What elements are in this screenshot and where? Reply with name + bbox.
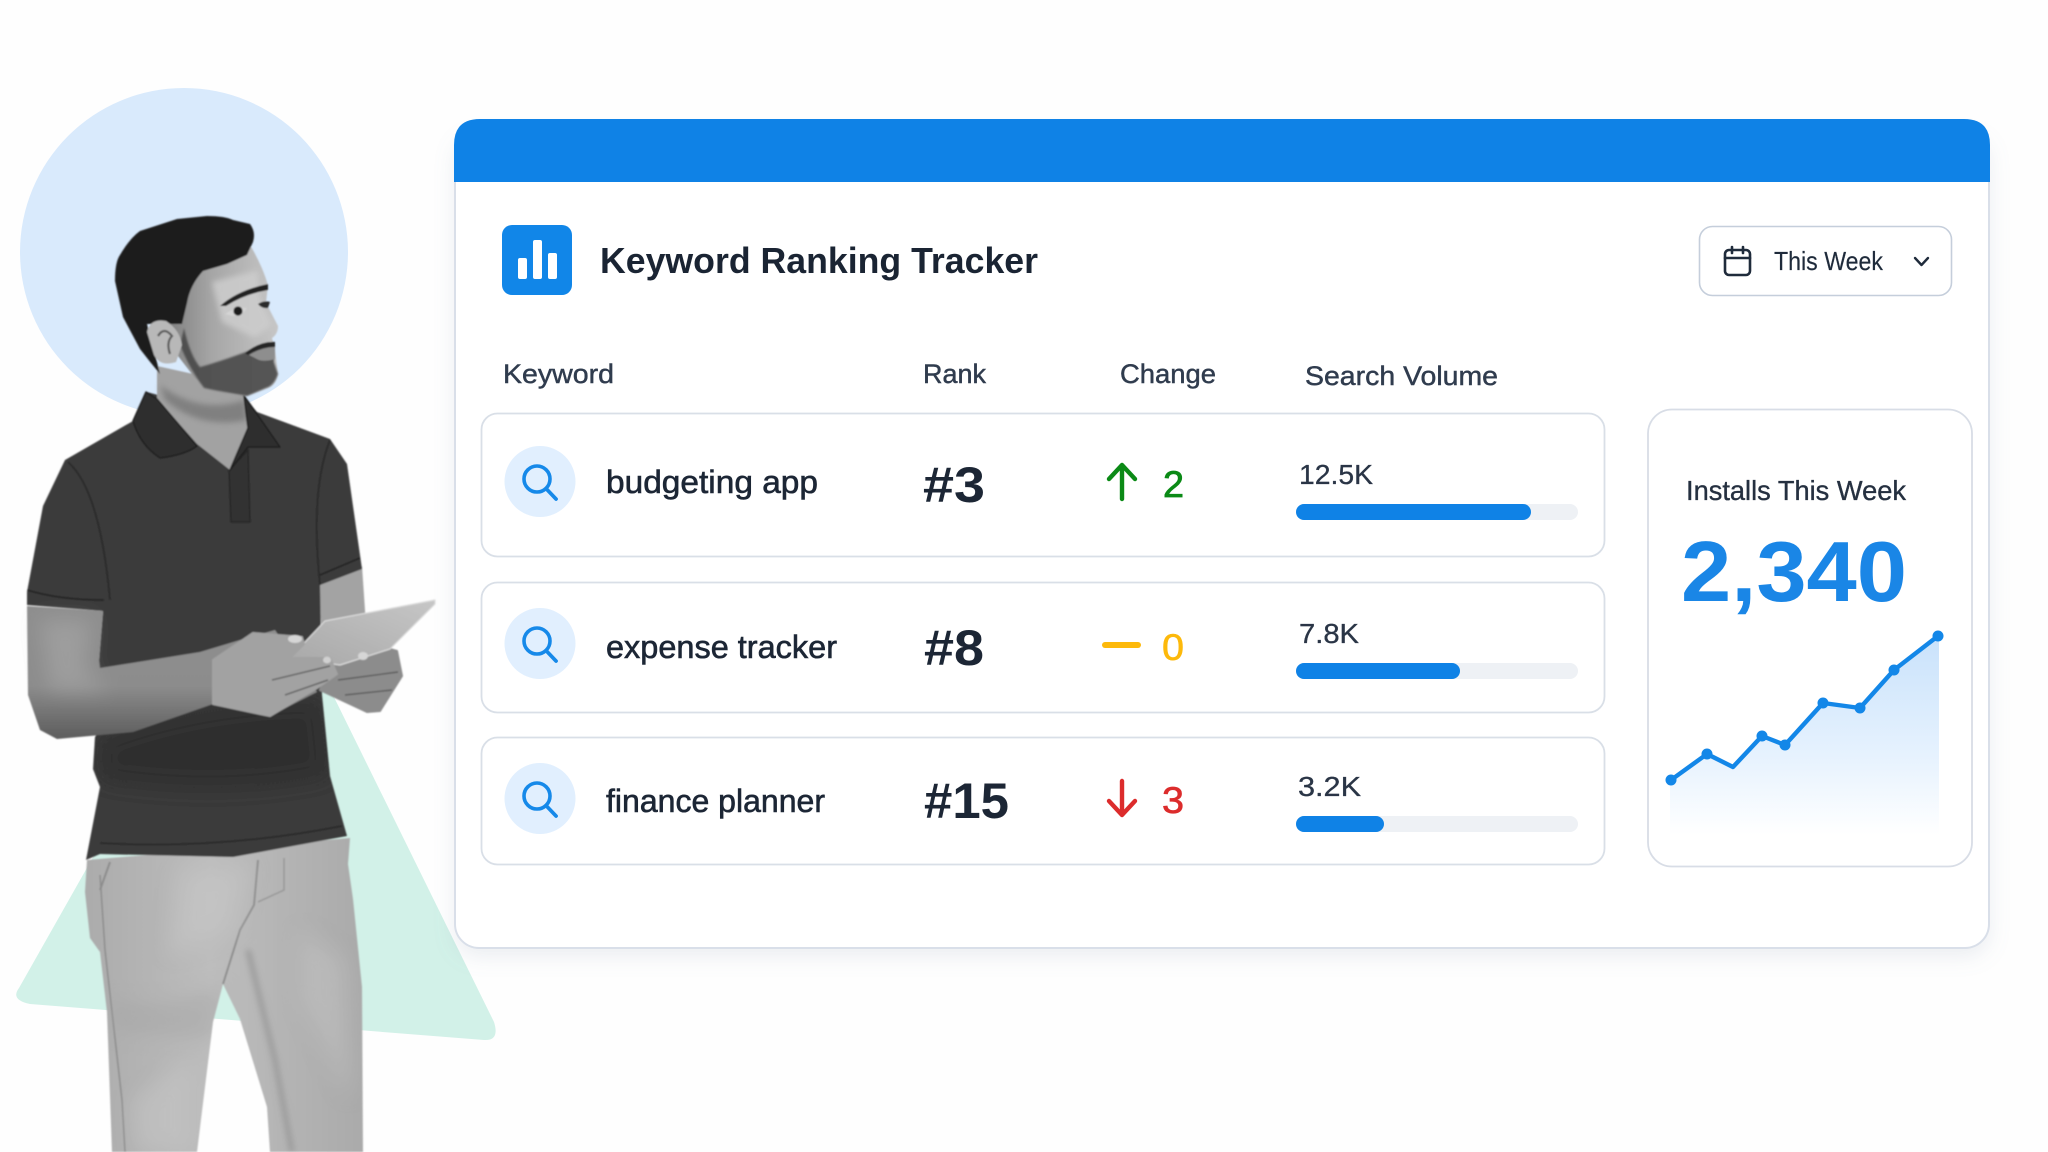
dropdown label: This Week: [1774, 246, 1884, 276]
placket: [229, 450, 250, 522]
left arm: [27, 606, 317, 739]
search volume: 12.5K: [1299, 459, 1373, 490]
change: dash: [1102, 642, 1141, 648]
big number: 2,340: [1681, 525, 1907, 620]
neck shadow: [160, 385, 247, 422]
far eye: [258, 301, 270, 308]
head: [115, 216, 278, 396]
column headings: Change: [1120, 359, 1216, 389]
collar: [133, 392, 280, 470]
face: [158, 245, 278, 396]
title: Keyword Ranking Tracker: [600, 240, 1038, 281]
eye: [225, 308, 247, 316]
change value: 3: [1162, 780, 1184, 821]
panel header bar: [454, 119, 1990, 182]
search volume: 3.2K: [1298, 771, 1361, 802]
row: budgeting app: [482, 414, 1604, 556]
rank: #3: [923, 457, 985, 513]
panel: installs this week: [1648, 410, 1972, 866]
icon: search: [504, 763, 576, 834]
rank: #15: [924, 773, 1009, 829]
keyword: expense tracker: [606, 629, 837, 665]
tablet: [290, 600, 435, 665]
forearm highlight: [40, 620, 110, 690]
iris: [233, 306, 243, 316]
shirt: [27, 392, 362, 860]
hair: [115, 216, 254, 374]
icon: search: [504, 446, 576, 517]
label: Installs This Week: [1686, 475, 1907, 506]
background triangle: [16, 555, 496, 1040]
column headings: [503, 359, 1498, 391]
column headings: Search Volume: [1305, 361, 1498, 391]
change: up arrow: [1109, 465, 1135, 499]
right hand: [320, 649, 402, 712]
beard: [180, 328, 278, 396]
trousers: [85, 838, 363, 1152]
date dropdown: [1700, 226, 1952, 296]
line chart: [1666, 630, 1944, 835]
volume bar: [1296, 816, 1578, 832]
eyebrow: [220, 284, 268, 306]
neck: [157, 366, 248, 470]
change value: 0: [1162, 627, 1184, 668]
person with tablet: [27, 216, 435, 1152]
panel: dashboard card: [454, 119, 1990, 948]
keyword: budgeting app: [606, 464, 818, 500]
icon: search: [504, 608, 576, 679]
change: down arrow: [1109, 781, 1135, 815]
volume bar: [1296, 663, 1578, 679]
row: expense tracker: [482, 582, 1604, 712]
change value: 2: [1163, 464, 1184, 505]
fingers: [213, 633, 398, 716]
ear: [147, 320, 182, 363]
row: finance planner: [482, 738, 1604, 864]
rank: #8: [924, 620, 984, 676]
icon: bar chart badge: [502, 225, 572, 295]
right arm upper: [318, 566, 366, 680]
icon: calendar: [1725, 247, 1750, 275]
lips: [249, 347, 275, 361]
column headings: Rank: [923, 359, 986, 389]
keyword: finance planner: [606, 783, 825, 819]
background circle: [20, 88, 348, 416]
search volume: 7.8K: [1299, 618, 1359, 649]
volume bar: [1296, 504, 1578, 520]
column headings: Keyword: [503, 359, 614, 389]
icon: chevron: [1915, 258, 1928, 265]
mouth: [245, 342, 275, 355]
